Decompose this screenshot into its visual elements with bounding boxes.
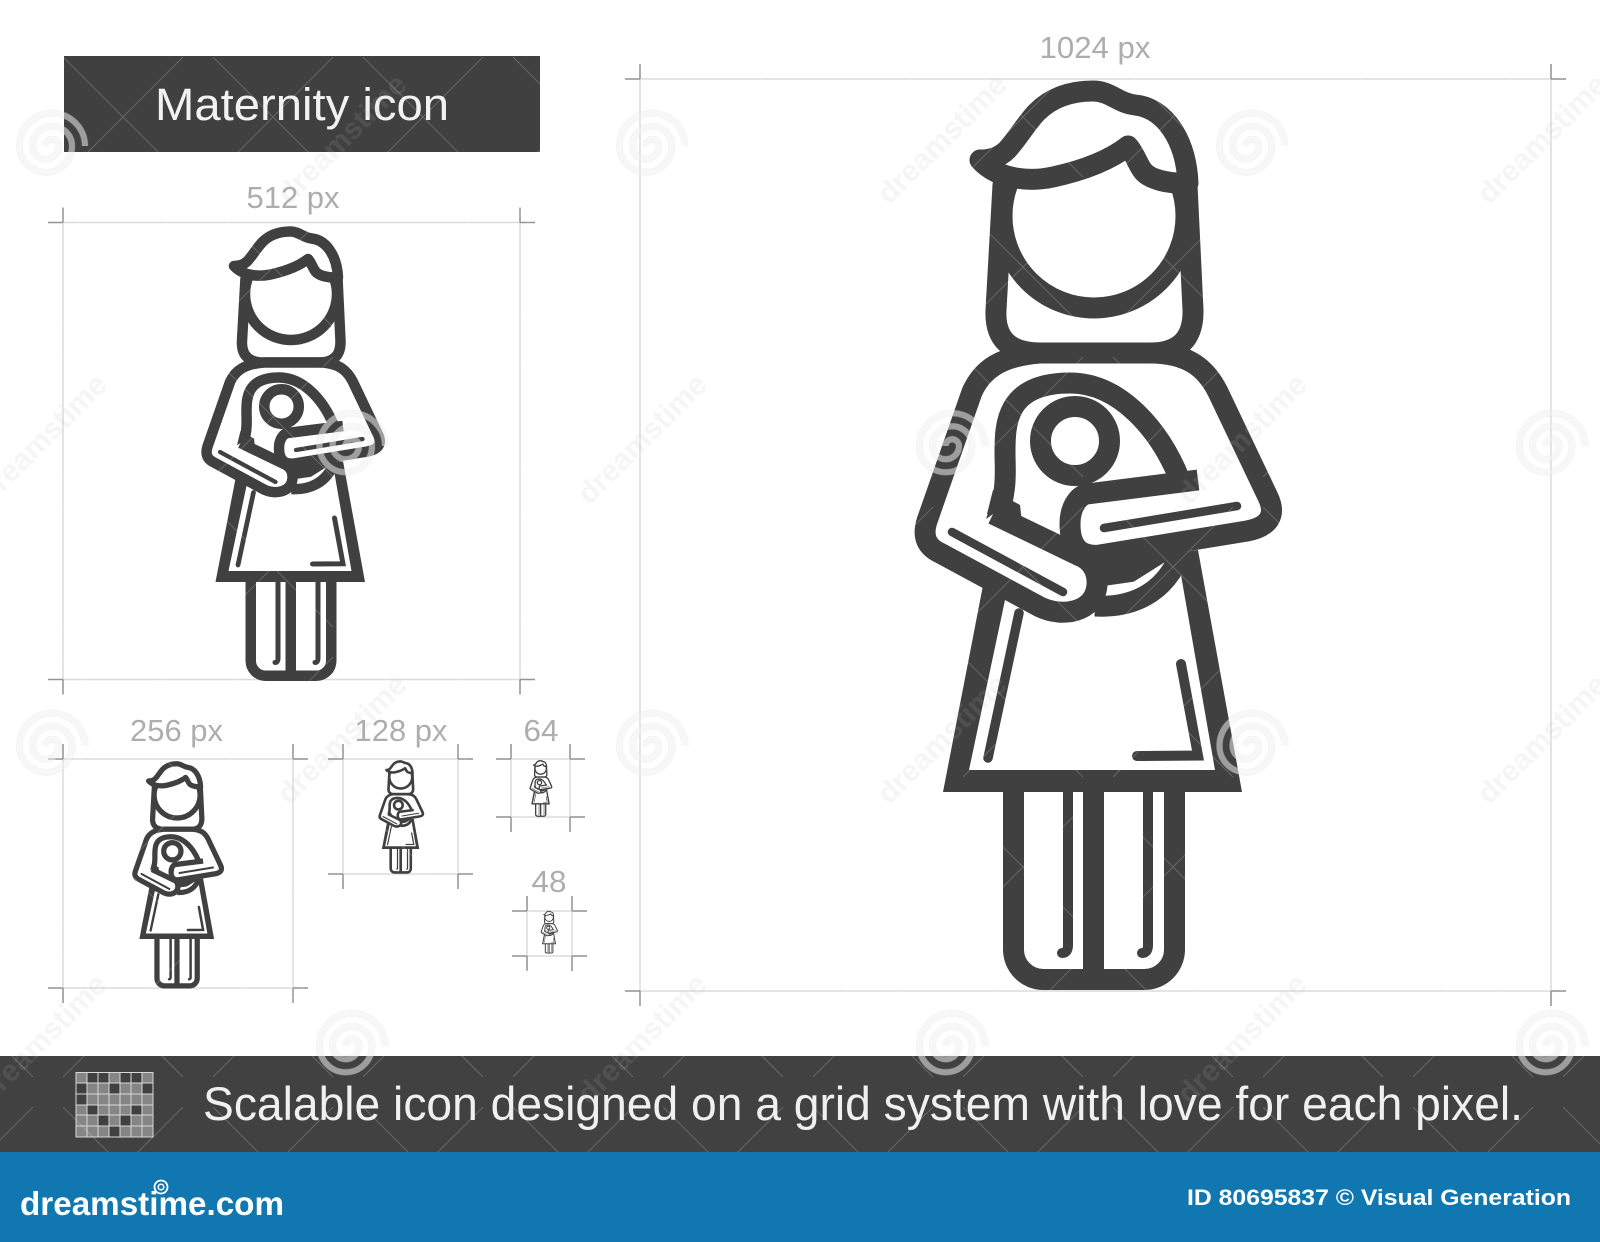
watermark layer: dreamstime [271, 68, 413, 210]
label: 1024 px: 1024 px [1040, 30, 1151, 65]
size frame: 128 px [328, 713, 473, 889]
label: 128 px: 128 px [354, 713, 448, 748]
label: 48: 48 [532, 864, 566, 899]
watermark layer: dreamstime [271, 668, 413, 810]
mother right arm [1040, 353, 1271, 555]
bottom caption bar [0, 1056, 1600, 1152]
icon: maternity figure, 128 px [380, 761, 423, 872]
watermark layer: dreamstime [571, 968, 713, 1110]
title text: Maternity icon [155, 79, 449, 130]
legs [1014, 785, 1174, 980]
watermark layer: dreamstime [871, 68, 1013, 210]
baby swaddle lower arc [1095, 552, 1181, 606]
title banner [64, 56, 540, 152]
caption text: Scalable icon designed on a grid system with love for each pixel. [203, 1077, 1523, 1130]
icon: maternity figure, 256 px [135, 764, 221, 986]
icon: maternity figure, 512 px [207, 232, 380, 676]
hair and neck [996, 185, 1193, 353]
icon: maternity figure, 48 px [541, 911, 557, 953]
watermark layer: dreamstime [1171, 968, 1313, 1110]
footer credit: ID 80695837 © Visual Generation [1187, 1185, 1571, 1210]
label: 256 px: 256 px [130, 713, 223, 748]
icon: maternity figure, 64 px [530, 761, 552, 816]
torso fill [925, 353, 1271, 614]
swaddle shadow wedge [987, 490, 1023, 531]
size frame: 64 px [496, 713, 585, 832]
size frame: 48 px [512, 864, 587, 971]
footer bar [0, 1152, 1600, 1242]
label: 512 px: 512 px [246, 180, 340, 215]
label: 64: 64 [524, 713, 558, 748]
icon: pixel grid with heart [76, 1072, 153, 1137]
size frame: 512 px [48, 180, 535, 694]
icon: maternity figure, 1024 px [925, 91, 1271, 980]
hair cap with fringe [980, 91, 1188, 183]
size frame: 256 px [48, 713, 308, 1003]
baby head [1040, 406, 1110, 476]
watermark layer: dreamstime [1171, 368, 1313, 510]
mother left arm [925, 353, 1097, 612]
baby swaddle [996, 383, 1180, 522]
dress [943, 550, 1242, 792]
face [1002, 124, 1186, 308]
footer logo: dreamstime.com [20, 1185, 284, 1222]
watermark layer: dreamstime [871, 668, 1013, 810]
watermark layer: dreamstime [571, 368, 713, 510]
